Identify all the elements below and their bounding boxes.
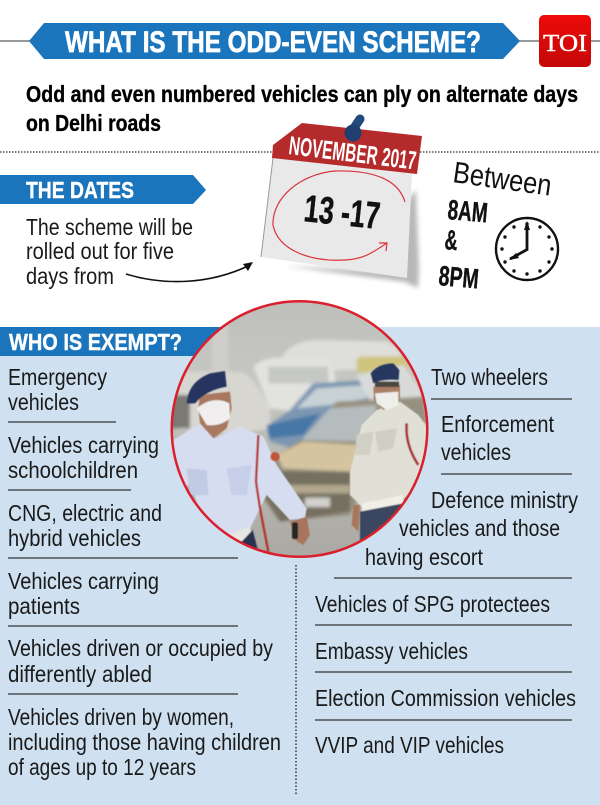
- item: defence: Defence ministry: [431, 487, 578, 513]
- item: schoolchildren: [8, 432, 159, 483]
- item: schoolchildren: Vehicles carrying: [8, 432, 159, 458]
- calendar: [261, 119, 422, 288]
- item: CNG: [8, 500, 162, 551]
- item: defence: having escort: [365, 544, 484, 570]
- item: SPG: Vehicles of SPG protectees: [315, 591, 550, 617]
- calendar dates: 13 -17: [302, 188, 382, 238]
- item: enforcement: Enforcement: [441, 411, 555, 437]
- item: differently abled: Vehicles driven or occupied by: [8, 635, 273, 661]
- intro text: on Delhi roads: [26, 110, 161, 136]
- pin: [344, 119, 362, 142]
- title banner: WHAT IS THE ODD-EVEN SCHEME?: [65, 26, 481, 59]
- dates description: [26, 214, 193, 289]
- exempt panel background: [0, 327, 600, 805]
- item: embassy: Embassy vehicles: [315, 638, 468, 664]
- the dates ribbon: [0, 175, 206, 204]
- policeman right: [350, 402, 428, 508]
- clock icon: [496, 218, 558, 280]
- item: patients: Vehicles carrying: [8, 568, 159, 594]
- item: emergency: [8, 364, 107, 415]
- TOI logo: [539, 15, 591, 67]
- intro text: [26, 81, 578, 136]
- item: emergency: vehicles: [8, 389, 79, 415]
- item: women: [8, 704, 281, 780]
- item: enforcement: [441, 411, 555, 465]
- calendar month: NOVEMBER 2017: [287, 130, 418, 176]
- item: emergency: Emergency: [8, 364, 107, 390]
- item: women: Vehicles driven by women,: [8, 704, 234, 730]
- the dates ribbon: THE DATES: [26, 177, 134, 203]
- dates description: rolled out for five: [26, 238, 174, 264]
- policeman left: [173, 423, 307, 535]
- item: women: including those having children: [8, 729, 281, 755]
- exempt list: left column: [8, 364, 281, 780]
- item: women: of ages up to 12 years: [8, 754, 196, 780]
- photo: traffic policemen in smog: [170, 295, 430, 565]
- red circled mark: [273, 171, 405, 260]
- item: patients: patients: [8, 593, 80, 619]
- times: 8AM: [446, 194, 489, 228]
- item: two wheelers: Two wheelers: [431, 364, 548, 390]
- who is exempt ribbon: WHO IS EXEMPT?: [9, 329, 182, 355]
- item: patients: [8, 568, 159, 619]
- item: CNG: hybrid vehicles: [8, 525, 141, 551]
- arrow to calendar: [126, 262, 253, 282]
- item: schoolchildren: schoolchildren: [8, 457, 138, 483]
- between label: Between: [451, 156, 554, 203]
- item: defence: vehicles and those: [399, 515, 560, 541]
- item: defence: [365, 487, 578, 570]
- item: differently abled: [8, 635, 273, 687]
- times: &: [443, 224, 459, 256]
- dates description: days from: [26, 263, 114, 289]
- item: CNG: CNG, electric and: [8, 500, 162, 526]
- item: enforcement: vehicles: [441, 439, 511, 465]
- TOI logo: TOI: [543, 31, 587, 57]
- exempt list: right column: [315, 364, 578, 758]
- times: [437, 194, 489, 294]
- dates description: The scheme will be: [26, 214, 193, 240]
- times: 8PM: [437, 260, 480, 294]
- item: VVIP: VVIP and VIP vehicles: [315, 732, 504, 758]
- item: differently abled: differently abled: [8, 661, 152, 687]
